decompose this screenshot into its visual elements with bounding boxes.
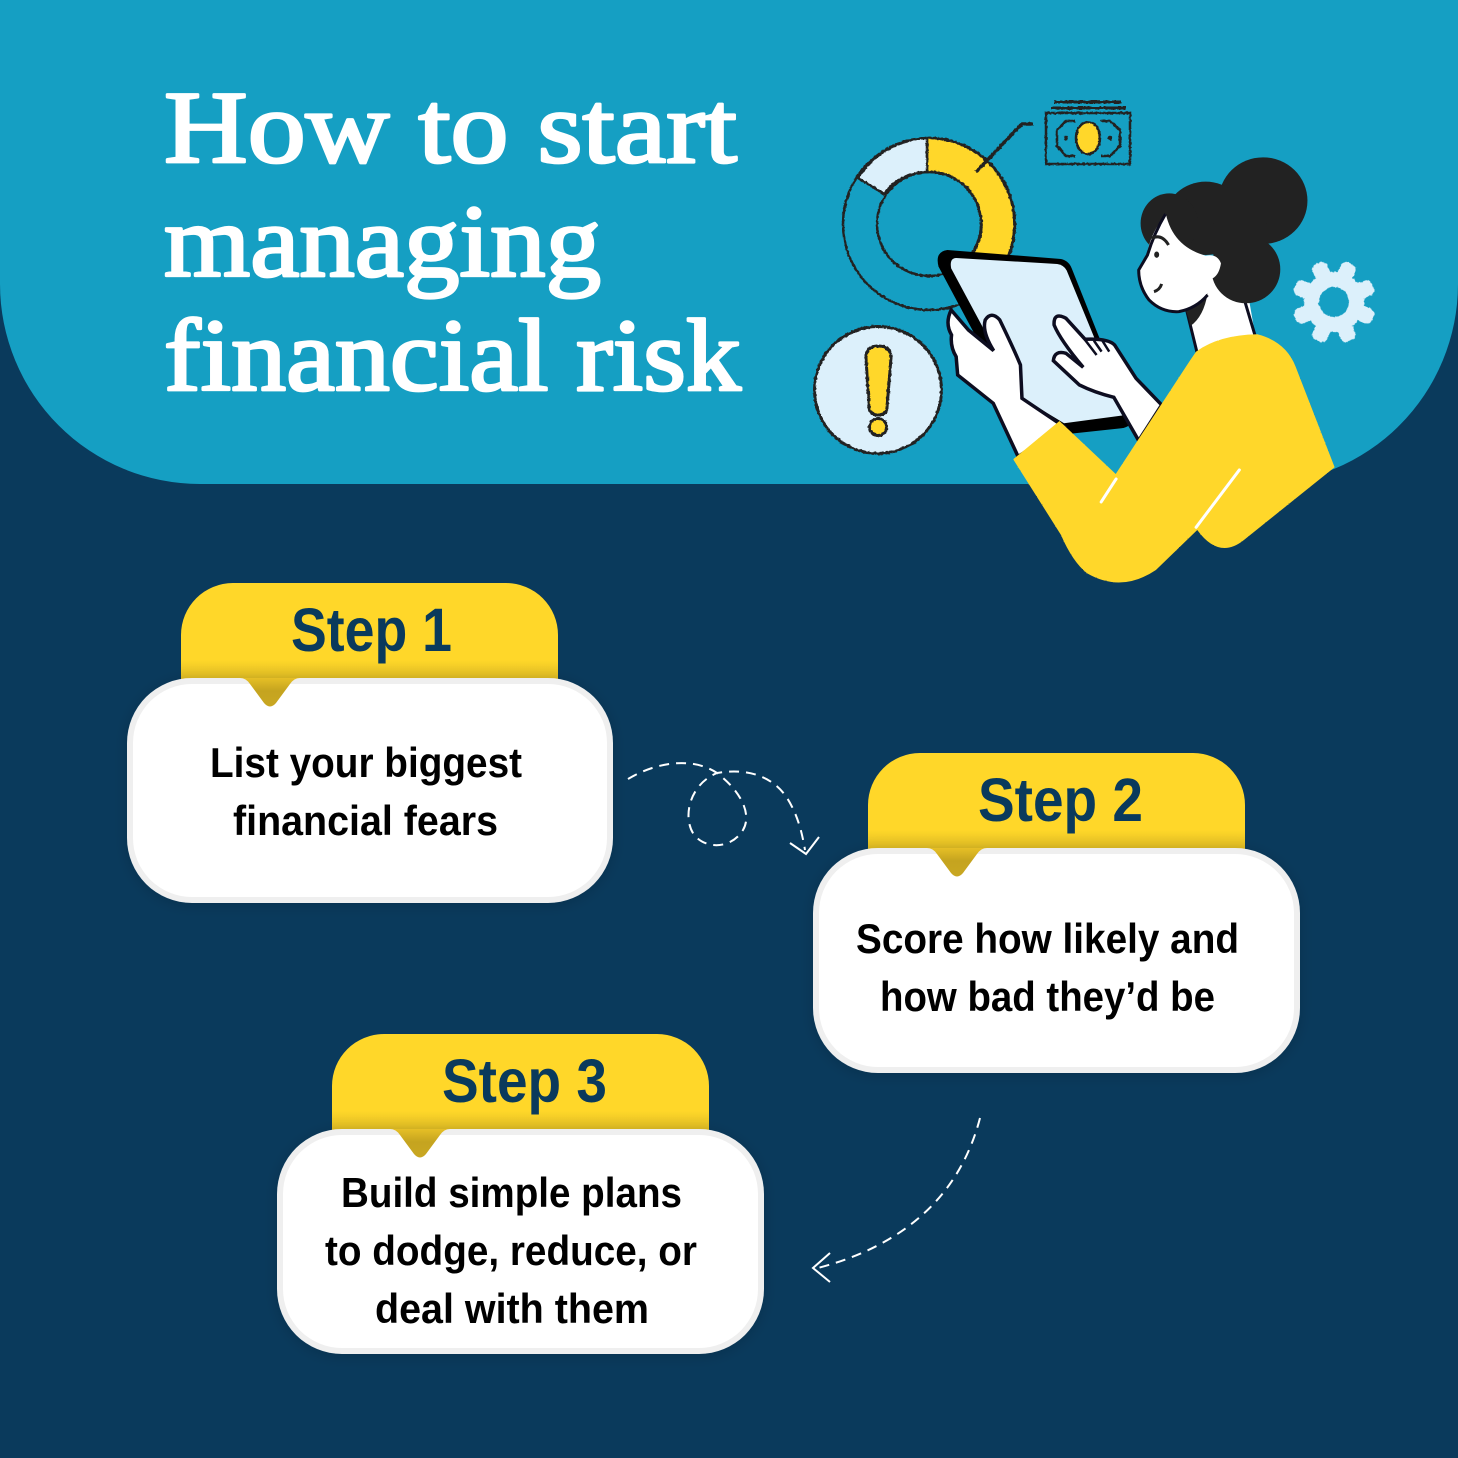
step 3 text: to dodge, reduce, or (325, 1227, 697, 1274)
icon: donut chart (843, 124, 1033, 310)
illustration: woman with tablet (938, 157, 1335, 583)
finger lines (1085, 340, 1109, 355)
step 2 text (856, 915, 1239, 1020)
step 3 pointer (390, 1129, 450, 1158)
step 3 tab (332, 1034, 709, 1151)
step 3 text: deal with them (375, 1285, 649, 1332)
step 2 tab (868, 753, 1245, 870)
step 3 text: Build simple plans (341, 1169, 682, 1216)
step 2 white box (813, 848, 1300, 1073)
eye, brow and mouth (1151, 237, 1169, 292)
card: step 3 (277, 1034, 764, 1354)
step 3 text (325, 1169, 697, 1332)
step 1 tab shading (181, 660, 558, 680)
step 2 text: how bad they’d be (880, 973, 1215, 1020)
title: managing (164, 185, 601, 299)
title (164, 71, 742, 413)
card: step 1 (127, 583, 613, 903)
right hand (1053, 316, 1162, 441)
step 1 label: Step 1 (291, 596, 452, 664)
icon: banknote (1046, 102, 1130, 164)
title: financial risk (164, 299, 742, 413)
header panel (0, 0, 1458, 484)
tablet (938, 250, 1131, 434)
step 1 pointer (240, 678, 300, 706)
step 2 pointer (927, 848, 987, 876)
card: step 2 (813, 753, 1300, 1073)
face (1139, 214, 1221, 312)
arrow: step 2 to step 3 (813, 1118, 980, 1282)
title: How to start (164, 71, 737, 185)
face outline (1139, 214, 1208, 312)
step 1 tab (181, 583, 558, 700)
step 1 text: List your biggest (210, 739, 522, 786)
step 1 text: financial fears (233, 797, 498, 844)
step 3 label: Step 3 (442, 1047, 607, 1115)
step 2 label: Step 2 (978, 766, 1143, 834)
step 2 text: Score how likely and (856, 915, 1239, 962)
step 3 tab shading (332, 1111, 709, 1131)
sleeve highlights (1101, 470, 1239, 527)
arrow: step 1 to step 2 (628, 763, 819, 854)
neck (1186, 270, 1255, 353)
step 1 text (210, 739, 522, 844)
icon: exclamation warning (814, 326, 942, 454)
left hand (948, 310, 1064, 457)
step 2 tab shading (868, 830, 1245, 850)
icon: gear (1279, 247, 1389, 357)
sweater (1013, 334, 1335, 583)
tablet screen (951, 258, 1126, 423)
step 1 white box (127, 678, 613, 903)
step 3 white box (277, 1129, 764, 1354)
hair (1141, 157, 1307, 303)
